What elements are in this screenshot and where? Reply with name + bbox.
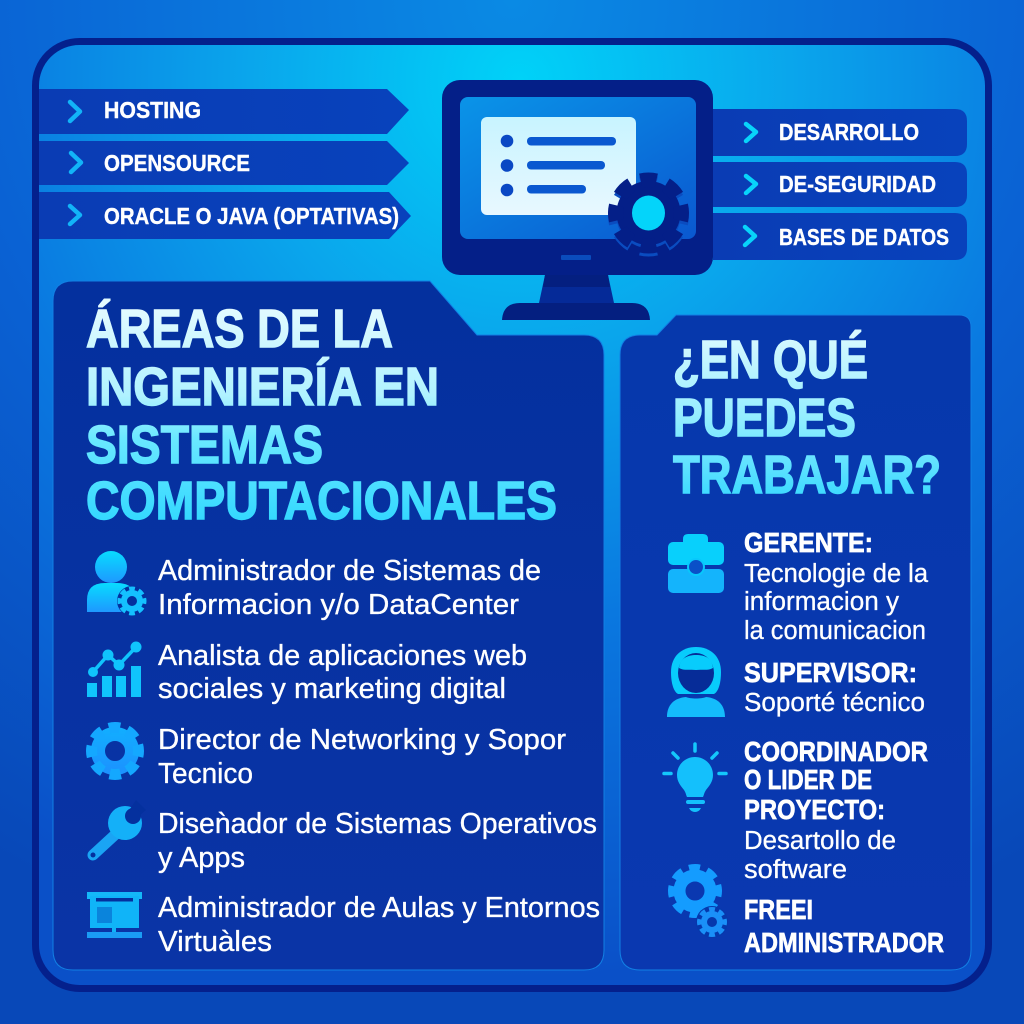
panel: areas: [53, 281, 604, 970]
heading: areas: COMPUTACIONALES: [86, 471, 557, 531]
heading: en que puedes trabajar: ¿EN QUÉ: [673, 330, 868, 390]
item: gerente: [668, 527, 929, 645]
icon: briefcase: [668, 534, 724, 593]
item: director: Director de Networking y Sopor: [158, 724, 566, 756]
icon: monitor: [442, 80, 713, 320]
right bar list: [713, 109, 967, 260]
bar: Desarrollo: [713, 109, 967, 156]
arrow: Oracle o Java: ORACLE O JAVA (OPTATIVAS): [104, 203, 399, 229]
item: gerente: Tecnologie de la: [744, 560, 929, 588]
icon: wrench: [90, 800, 146, 858]
item: freelance administrador: FREEI: [744, 894, 813, 925]
item: coordinador: O LIDER DE: [744, 764, 872, 795]
arrow: Opensource: OPENSOURCE: [104, 150, 250, 176]
item: administrador de sistemas: Administrador de Sistemas de: [158, 555, 541, 587]
item: gerente: informacion y: [744, 588, 899, 616]
icon: two gears: [673, 869, 728, 938]
item: supervisor: Soporté técnico: [744, 689, 925, 717]
item: disenador: [90, 800, 597, 874]
bar: De-seguridad: DE-SEGURIDAD: [779, 171, 936, 197]
heading: areas: ÁREAS DE LA: [86, 299, 393, 359]
item: coordinador: [664, 736, 928, 884]
item: coordinador: COORDINADOR: [744, 736, 928, 767]
item: analista: [87, 640, 527, 705]
item: freelance administrador: ADMINISTRADOR: [744, 927, 944, 958]
arrow: Hosting: HOSTING: [104, 97, 201, 123]
heading: areas: SISTEMAS: [86, 415, 323, 475]
item: coordinador: Desartollo de: [744, 827, 896, 855]
item: coordinador: software: [744, 856, 847, 884]
item: gerente: la comunicacion: [744, 617, 926, 645]
heading: areas: [86, 299, 557, 531]
arrow: Hosting: [39, 89, 409, 134]
bar: De-seguridad: [713, 162, 967, 207]
item: coordinador: PROYECTO:: [744, 794, 885, 825]
heading: en que puedes trabajar: [673, 330, 941, 505]
heading: en que puedes trabajar: TRABAJAR?: [673, 445, 941, 505]
icon: user with gear: [87, 551, 147, 616]
item: administrador de sistemas: [87, 551, 541, 621]
icon: gear: [92, 728, 138, 774]
icon: classroom screen: [87, 892, 142, 938]
item: aulas: [87, 892, 600, 958]
item: analista: Analista de aplicaciones web: [158, 640, 527, 672]
item: administrador de sistemas: Informacion y/o DataCenter: [158, 589, 519, 621]
arrow: Oracle o Java: [39, 192, 411, 239]
item: director: [92, 724, 566, 790]
panel: trabajo: [620, 315, 971, 970]
item: aulas: Virtuàles: [158, 926, 272, 958]
item: disenador: y Apps: [158, 842, 245, 874]
bar: Bases de datos: [713, 213, 967, 260]
heading: areas: INGENIERÍA EN: [86, 357, 439, 417]
item: analista: sociales y marketing digital: [158, 673, 506, 705]
item: supervisor: SUPERVISOR:: [744, 657, 917, 688]
item: director: Tecnico: [158, 758, 253, 790]
heading: en que puedes trabajar: PUEDES: [673, 388, 856, 448]
icon: person with headset: [667, 647, 725, 717]
item: disenador: Diseǹador de Sistemas Operativos: [158, 808, 597, 840]
item: freelance administrador: [673, 869, 944, 958]
item: aulas: Administrador de Aulas y Entornos: [158, 892, 600, 924]
left arrow list: [39, 89, 411, 239]
arrow: Opensource: [39, 141, 409, 185]
bar: Desarrollo: DESARROLLO: [779, 119, 919, 145]
icon: light bulb: [664, 744, 726, 812]
bar: Bases de datos: BASES DE DATOS: [779, 224, 949, 250]
item: supervisor: [667, 647, 925, 717]
item: gerente: GERENTE:: [744, 527, 873, 558]
icon: growth chart: [87, 642, 142, 697]
